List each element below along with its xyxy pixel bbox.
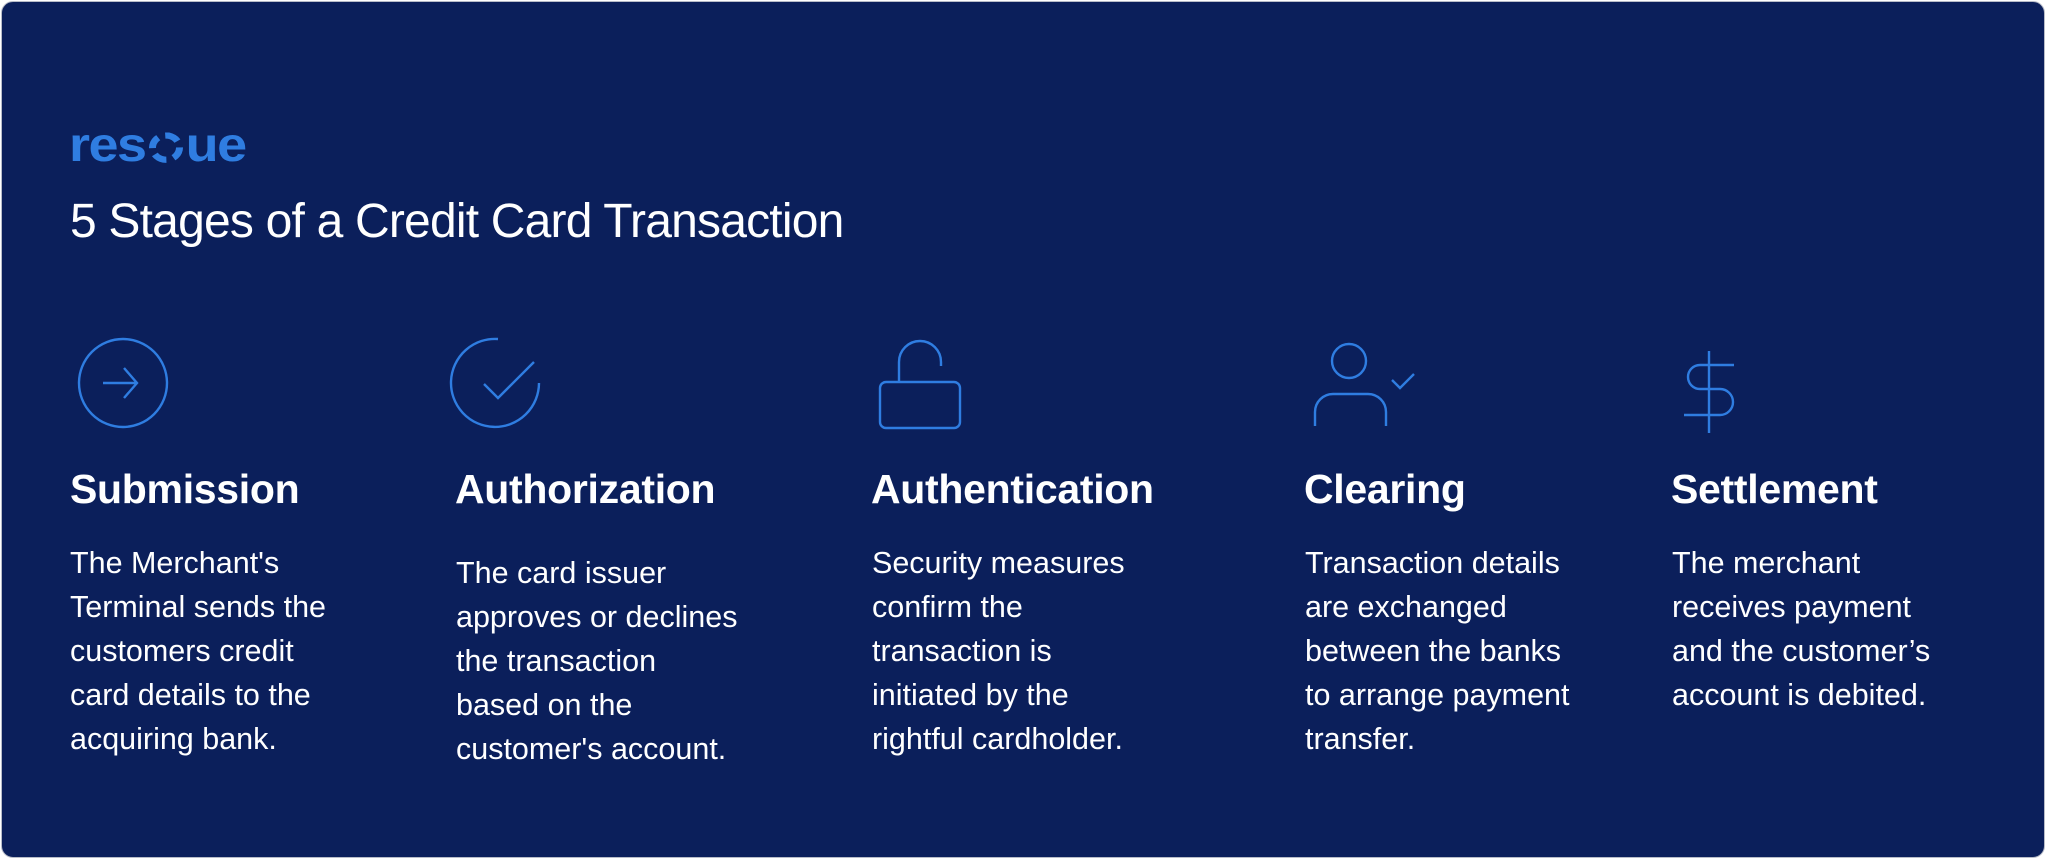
text: Settlement bbox=[1672, 546, 1930, 712]
text: Settlement: The merchant bbox=[1672, 546, 1860, 580]
text: Submission: Terminal sends the bbox=[70, 590, 326, 624]
text: Settlement: and the customer’s bbox=[1672, 634, 1930, 668]
text: Submission: card details to the bbox=[70, 678, 311, 712]
text: Submission: The Merchant's bbox=[70, 546, 279, 580]
heading: Authorization: Authorization bbox=[455, 466, 715, 512]
text: Authentication: initiated by the bbox=[872, 678, 1069, 712]
text: Authentication: rightful cardholder. bbox=[872, 722, 1123, 756]
text: Authentication bbox=[872, 546, 1125, 756]
icon: unlocked padlock bbox=[878, 340, 962, 430]
text: Submission: customers credit bbox=[70, 634, 294, 668]
text: Authorization: based on the bbox=[456, 688, 632, 722]
text: Authorization: customer's account. bbox=[456, 732, 726, 766]
heading: Clearing: Clearing bbox=[1304, 466, 1466, 512]
title: 5 Stages of a Credit Card Transaction bbox=[70, 195, 844, 248]
text: Submission: acquiring bank. bbox=[70, 722, 277, 756]
text: Authentication: confirm the bbox=[872, 590, 1023, 624]
text: Authorization: approves or declines bbox=[456, 600, 737, 634]
text: Clearing: to arrange payment bbox=[1305, 678, 1570, 712]
text: Authorization: The card issuer bbox=[456, 556, 666, 590]
text: Clearing bbox=[1305, 546, 1570, 756]
text: Authentication: transaction is bbox=[872, 634, 1052, 668]
text: Authorization bbox=[456, 556, 737, 766]
heading: Authentication: Authentication bbox=[871, 466, 1154, 512]
heading: Submission: Submission bbox=[70, 466, 299, 512]
text: Clearing: Transaction details bbox=[1305, 546, 1560, 580]
icon: check circle bbox=[450, 338, 540, 428]
logo: res ue bbox=[69, 118, 246, 172]
text: Authorization: the transaction bbox=[456, 644, 656, 678]
text: Settlement: receives payment bbox=[1672, 590, 1911, 624]
icon: person check bbox=[1314, 342, 1415, 426]
icon: dollar sign bbox=[1684, 351, 1734, 433]
text: Authentication: Security measures bbox=[872, 546, 1125, 580]
text: Submission bbox=[70, 546, 326, 756]
text: Clearing: transfer. bbox=[1305, 722, 1415, 756]
icon: arrow circle bbox=[78, 338, 168, 428]
text: Settlement: account is debited. bbox=[1672, 678, 1926, 712]
text: Clearing: between the banks bbox=[1305, 634, 1561, 668]
text: Clearing: are exchanged bbox=[1305, 590, 1507, 624]
heading: Settlement: Settlement bbox=[1671, 466, 1878, 512]
